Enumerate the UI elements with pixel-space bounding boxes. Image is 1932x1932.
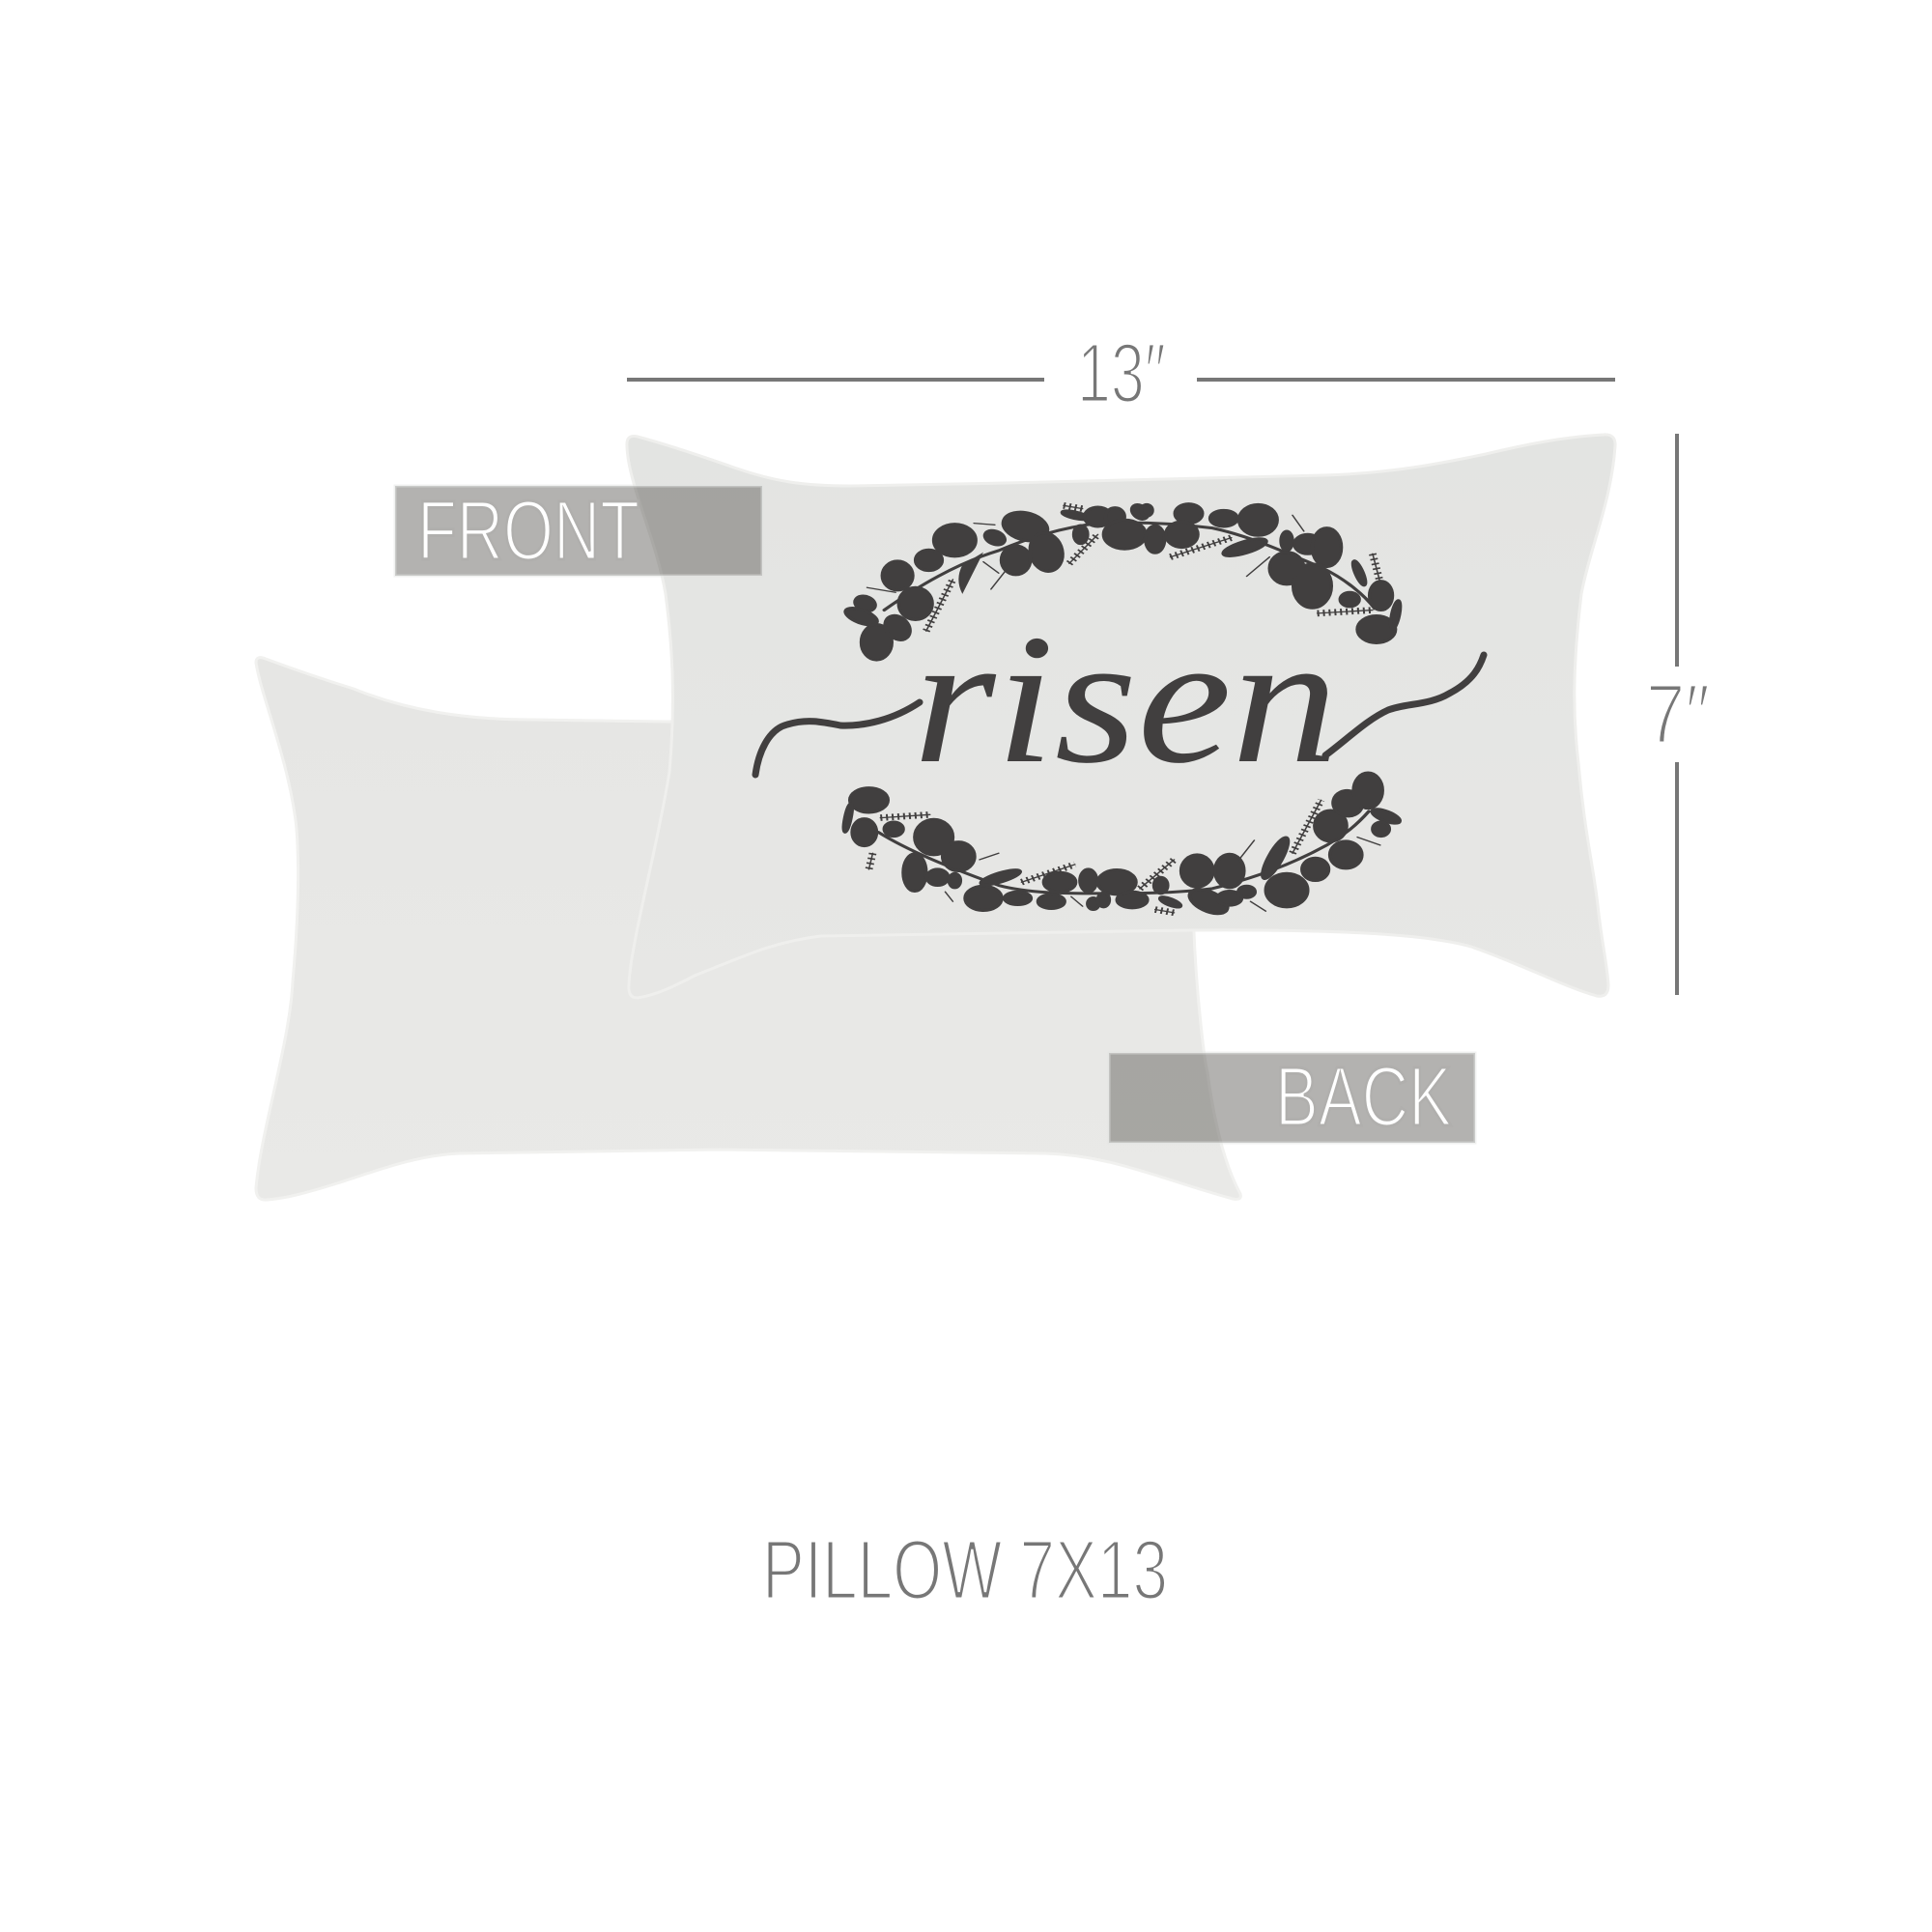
script flourish left <box>755 702 920 775</box>
height dimension: 7 inches: 7″ <box>1646 668 1710 761</box>
bottom wreath <box>842 773 1403 919</box>
width dimension: 13 inches <box>627 327 1615 420</box>
height dimension: 7 inches <box>1646 434 1710 995</box>
label: BACK: BACK <box>1275 1050 1452 1144</box>
label: BACK <box>1109 1050 1475 1144</box>
script word: risen: risen <box>913 596 1338 802</box>
script flourish right <box>1325 655 1484 755</box>
label: FRONT: FRONT <box>417 484 639 578</box>
front pillow <box>627 435 1615 998</box>
back pillow <box>256 658 1240 1200</box>
top wreath <box>842 502 1403 660</box>
width dimension: 13 inches: 13″ <box>1077 327 1166 420</box>
caption: PILLOW 7X13 <box>762 1523 1168 1617</box>
